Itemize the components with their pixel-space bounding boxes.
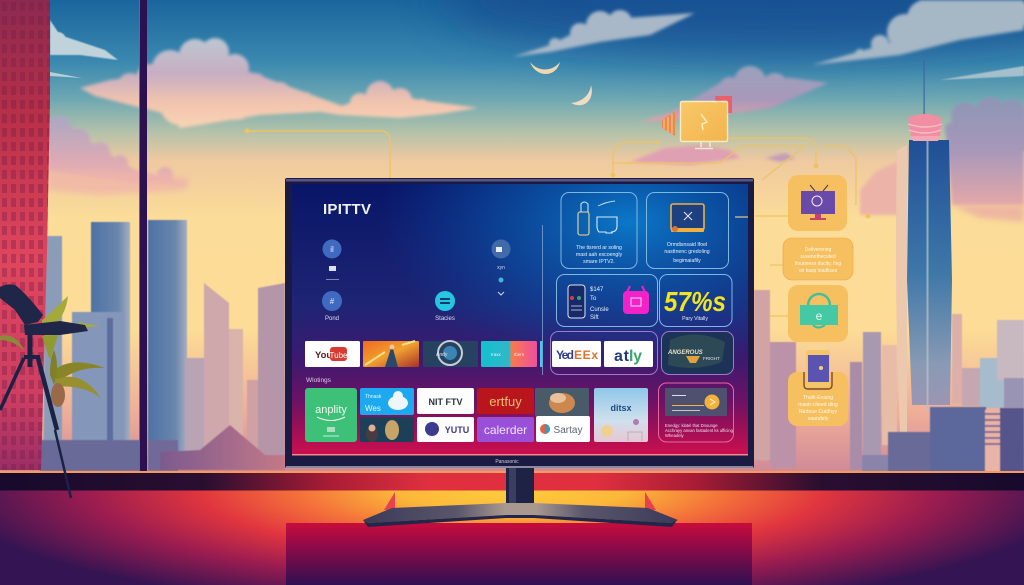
feature card two: begimaiafily: [673, 258, 701, 264]
tripod chair and plant: [0, 284, 105, 498]
icon: speaker waves: [662, 112, 675, 136]
logo: yedex: EEx: [574, 348, 598, 362]
icon: menu button two: #: [330, 297, 335, 306]
app: dark poster: [360, 417, 414, 442]
icon: services button: Stacies: [435, 316, 455, 322]
feature card four: big number: Pary Vitally: [682, 316, 708, 322]
feature card one: mast aah excoengly: [576, 252, 622, 258]
app: blue poster: Andy: [436, 352, 448, 358]
icon: right side controls: xyn: [497, 265, 505, 271]
main cloud: [80, 38, 478, 128]
brand label: Panasonic: [495, 459, 519, 465]
card: text description: fiounness ducity, fing: [795, 261, 841, 267]
app: teal and orange tile: Iraxx: [491, 352, 502, 357]
icon: pink tv: [623, 286, 649, 314]
card: text description: suvennthecuted: [800, 254, 836, 260]
app: green: [305, 388, 357, 442]
card: phone with text: Thalk-Evaing: [803, 395, 833, 401]
feature card three: $147: [590, 287, 604, 293]
app: orange poster: [363, 341, 419, 367]
dark poster panel: ANGEROUS: [667, 350, 703, 356]
feature card two: Ormdisnsaid Ifoel: [667, 242, 707, 248]
info panel: Acchrayy anvan fastadent ks ufficing: [665, 428, 734, 433]
tv stand: [363, 466, 678, 527]
feature card three: To: [590, 296, 597, 302]
info panel: [658, 383, 734, 442]
app: sartay: Sartay: [554, 425, 582, 436]
feature card three: Sift: [590, 315, 599, 321]
feature card one: [561, 192, 637, 268]
tv bezel: [285, 178, 754, 468]
icon: services button: [435, 291, 455, 322]
logo: atly: ly: [629, 348, 642, 365]
app: youtube: Tube: [330, 351, 348, 360]
dark poster panel: [662, 332, 734, 374]
card: tv icon: [788, 175, 847, 231]
app: yutu: [417, 417, 474, 442]
app: nit ftv: NIT FTV: [428, 397, 462, 407]
app: ditsx: [594, 388, 648, 442]
info panel: Wheadely: [665, 433, 685, 438]
feature card four: big number: 57%s: [664, 286, 726, 317]
app: youtube: [305, 341, 360, 367]
logo: atly: [604, 341, 653, 367]
app: ditsx: ditsx: [610, 403, 632, 413]
feature card one: The tisrerd ar soling: [576, 245, 622, 251]
card: lock icon: e: [816, 309, 823, 323]
app: youtube: You: [315, 350, 332, 361]
tv floor reflection: [286, 523, 752, 585]
feature card one: smare IPTV2.: [583, 259, 615, 265]
app: purple: [477, 417, 534, 442]
pink cloud under monitor: [630, 145, 740, 165]
app: green: anplity: [315, 404, 347, 416]
right rail: icon cards: [783, 175, 853, 426]
card: phone with text: Radoue Cuidhyy: [799, 409, 838, 415]
app: hand poster: [535, 388, 589, 416]
plant: [0, 296, 105, 407]
crescent moons: [530, 62, 592, 105]
lower right city block: [862, 407, 1024, 472]
tall tower: [896, 60, 952, 432]
section label: Wlotings: [306, 377, 332, 384]
icon: menu button one: il: [330, 245, 334, 254]
app: yutu: YUTU: [445, 425, 469, 435]
logo: atly: at: [614, 348, 630, 365]
feature card two: nasttnenc gredoling: [664, 249, 710, 255]
app grid: [305, 388, 648, 442]
card: phone with text: saandely: [808, 416, 829, 422]
icon: menu button two: Pond: [325, 316, 339, 322]
feature card three: Cunsle: [590, 307, 609, 313]
icon: right side controls: [492, 240, 510, 295]
feature card two: [646, 192, 728, 268]
left red building: [0, 0, 50, 470]
card: text description: Deliverering: [805, 247, 832, 253]
card: phone with text: mastr-clieed ding: [798, 402, 838, 408]
skyline buildings left: [40, 220, 285, 471]
app: red: [477, 388, 534, 414]
clouds: [48, 0, 1024, 222]
app: blue cloud: Wes: [365, 404, 381, 413]
app: red: ertfuy: [489, 394, 522, 409]
tv: [285, 178, 754, 468]
connector dots: [244, 128, 870, 218]
app: purple: calerder: [484, 423, 527, 437]
floating monitor icon: [662, 96, 732, 148]
right cloud: [945, 97, 1024, 205]
card: text description: on kasp leadlises: [799, 268, 838, 274]
app: nit ftv: [417, 388, 474, 414]
dark poster panel: FRIGHT: [703, 356, 720, 361]
app: teal and orange tile: Ibern: [514, 352, 525, 357]
screen content: [305, 192, 734, 442]
tripod legs: [0, 335, 71, 498]
partner logo panel: [550, 332, 658, 374]
icon: menu button two: [322, 291, 342, 322]
top right cloud: [812, 0, 1024, 65]
feature card four: big number: [660, 274, 732, 326]
top left cloud: [50, 20, 118, 60]
gold connector lines: [247, 131, 856, 316]
card: phone with text: [788, 350, 848, 426]
card: text description: [783, 238, 853, 280]
tv screen: [292, 184, 748, 455]
connector stub at screen edge: [735, 216, 748, 218]
feature card three: [556, 274, 658, 326]
skyline buildings right: [754, 290, 1024, 470]
heading: IPITTV: [323, 201, 371, 218]
app: blue cloud: [360, 388, 414, 415]
app: blue poster: [423, 341, 478, 367]
info panel: Enedgy: klatel that Dnounge: [665, 423, 718, 428]
app: teal and orange tile: [481, 341, 537, 367]
logo: yedex: [552, 341, 601, 367]
chair seat and back: [0, 284, 43, 325]
logo: yedex: Yed: [556, 348, 574, 362]
divider: [542, 225, 543, 375]
app: sartay: [536, 416, 590, 442]
app row one: [305, 341, 542, 367]
window sill and floor: [0, 473, 1024, 585]
app: blue cloud: Thnask: [365, 394, 382, 400]
cloud behind monitor: [640, 66, 828, 122]
icon: menu button one: [322, 240, 342, 280]
top center cloud: [512, 10, 695, 57]
card: lock icon: [788, 285, 848, 342]
left lower cloud: [48, 115, 190, 185]
